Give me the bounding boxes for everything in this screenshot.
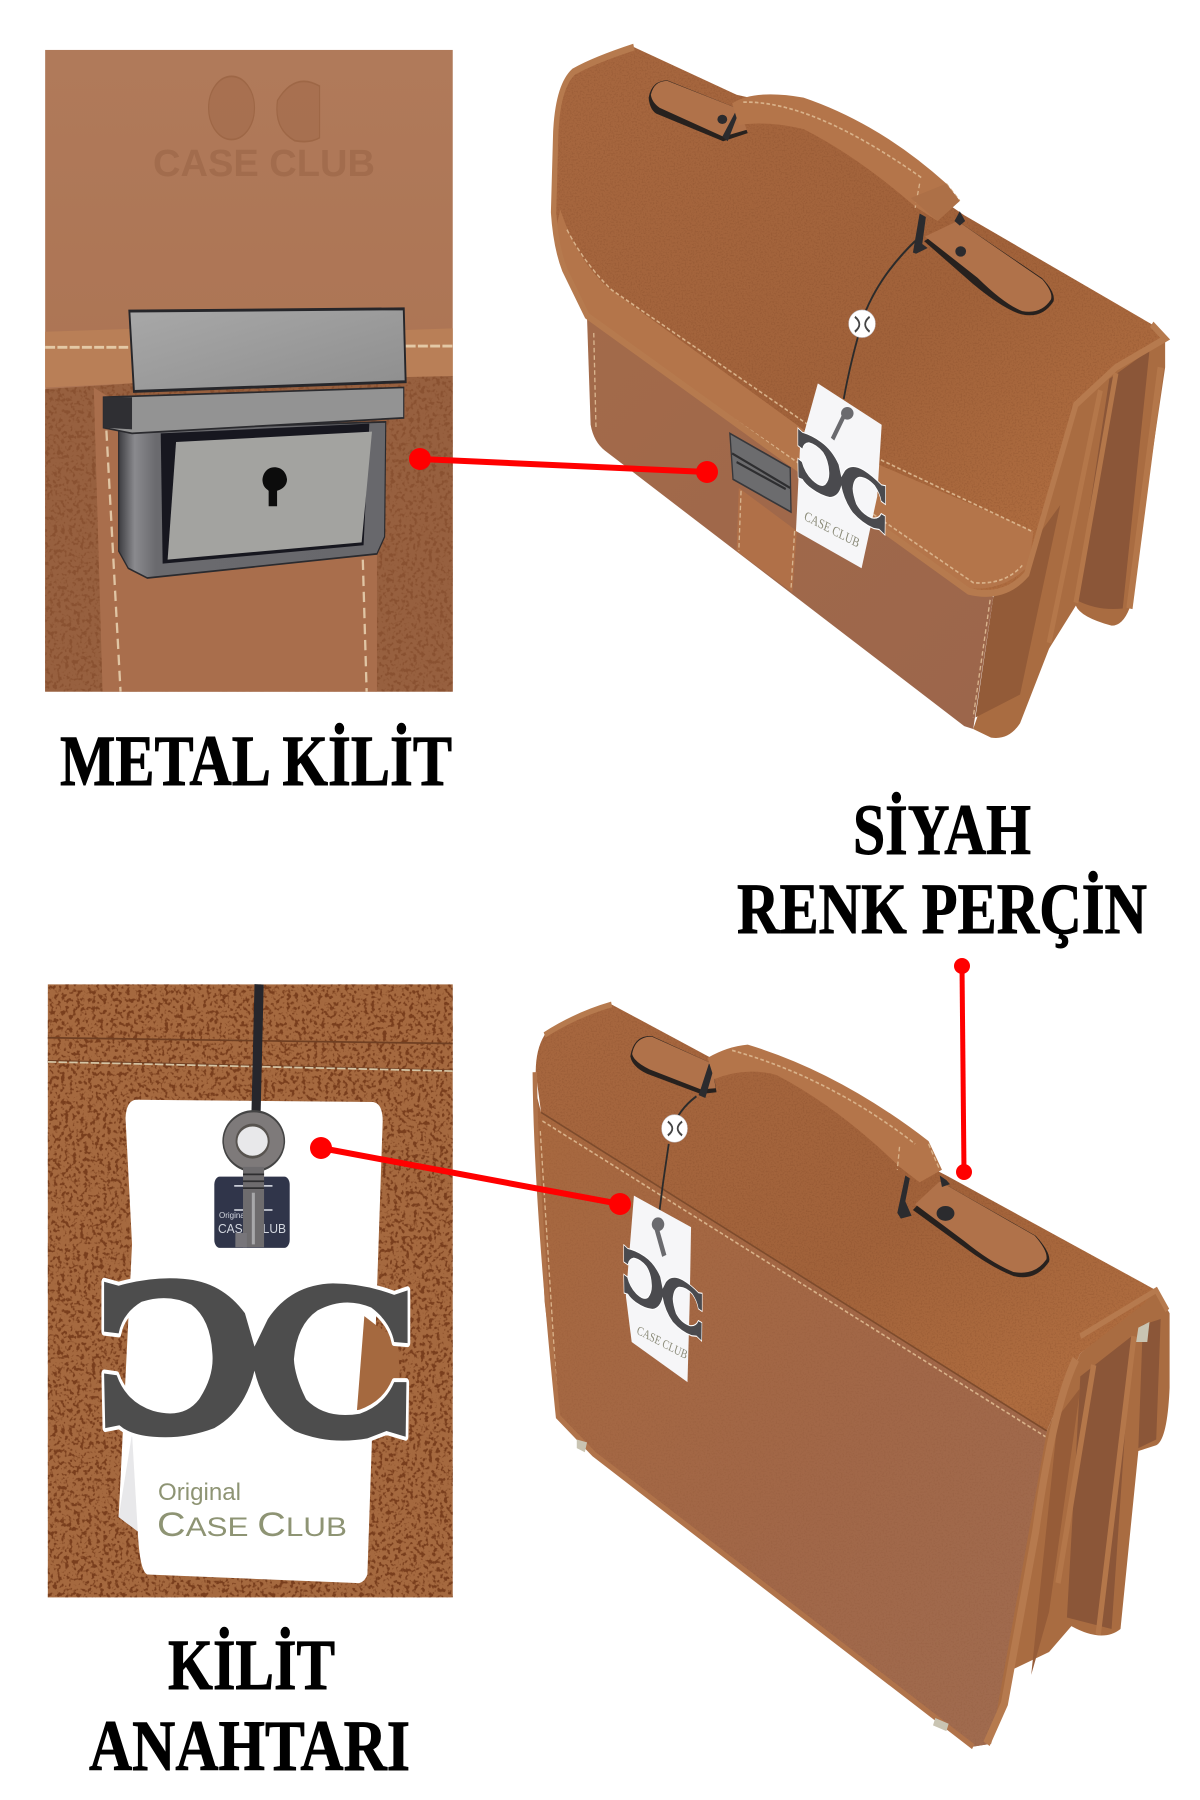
keyhole	[263, 467, 287, 506]
flap piping	[554, 47, 1165, 593]
heading: lock key: KİLİT	[168, 1625, 335, 1705]
heading: black rivet	[737, 790, 1147, 949]
callout line: metal lock	[409, 448, 718, 483]
stitched seam	[48, 1038, 453, 1070]
briefcase: back view	[533, 1004, 1170, 1747]
tag brand text	[157, 1479, 347, 1544]
front body	[587, 310, 993, 729]
tag logo	[624, 1244, 702, 1342]
handle straps	[649, 80, 1054, 315]
metal lock	[103, 309, 406, 578]
rivets	[699, 1064, 954, 1221]
gussets	[973, 339, 1165, 738]
handle	[708, 1045, 942, 1182]
heading: lock key: ANAHTARI	[89, 1706, 410, 1786]
key card	[214, 1177, 290, 1248]
tag thread	[844, 241, 915, 399]
hang tag: CASE CLUB	[803, 508, 861, 551]
tag logo	[798, 428, 885, 536]
hang tag	[624, 1196, 702, 1382]
front face	[533, 1072, 1047, 1747]
large logo	[104, 1278, 408, 1441]
panel: key close-up	[48, 984, 453, 1597]
thread charm	[662, 1115, 687, 1142]
hang tag: CASE CLUB	[635, 1324, 689, 1362]
gussets	[973, 1290, 1170, 1747]
key card: CASE CLUB	[218, 1221, 286, 1236]
central leather strap	[94, 387, 377, 692]
handle straps	[630, 1036, 1049, 1277]
hang tag	[796, 383, 885, 568]
small lock	[730, 433, 791, 512]
cord	[256, 984, 259, 1130]
heading: metal lock: METAL KİLİT	[60, 721, 452, 801]
panel: metal lock close-up	[45, 50, 453, 692]
white hang tag	[119, 1100, 383, 1583]
key card: Original	[219, 1211, 247, 1220]
textured lower leather	[45, 376, 453, 692]
tag thread	[658, 1096, 696, 1219]
heading: black rivet: SİYAH	[853, 790, 1031, 870]
embossed logo mark	[209, 76, 320, 142]
briefcase: front view	[554, 47, 1165, 738]
embossed brand text: CASE CLUB	[153, 143, 375, 185]
vertical strap	[594, 333, 990, 718]
flap band	[556, 210, 1033, 589]
tag brand text: Original	[158, 1479, 241, 1506]
key	[223, 1111, 284, 1247]
top surface	[536, 1004, 1156, 1431]
tag brand text: CASE CLUB	[157, 1506, 347, 1544]
flap	[554, 47, 1165, 593]
flap edge band	[45, 328, 453, 387]
heading: lock key	[89, 1625, 410, 1786]
seams and piping	[535, 1004, 1167, 1747]
callout line: black rivet	[954, 958, 972, 1180]
feet	[577, 1322, 1150, 1731]
callout line: lock key	[310, 1137, 631, 1215]
smooth flap leather	[45, 50, 453, 692]
leather sliver in logo	[357, 1316, 400, 1414]
pebbled leather	[48, 984, 453, 1597]
rivets	[717, 111, 966, 257]
handle	[732, 94, 960, 221]
thread charm	[849, 310, 875, 338]
